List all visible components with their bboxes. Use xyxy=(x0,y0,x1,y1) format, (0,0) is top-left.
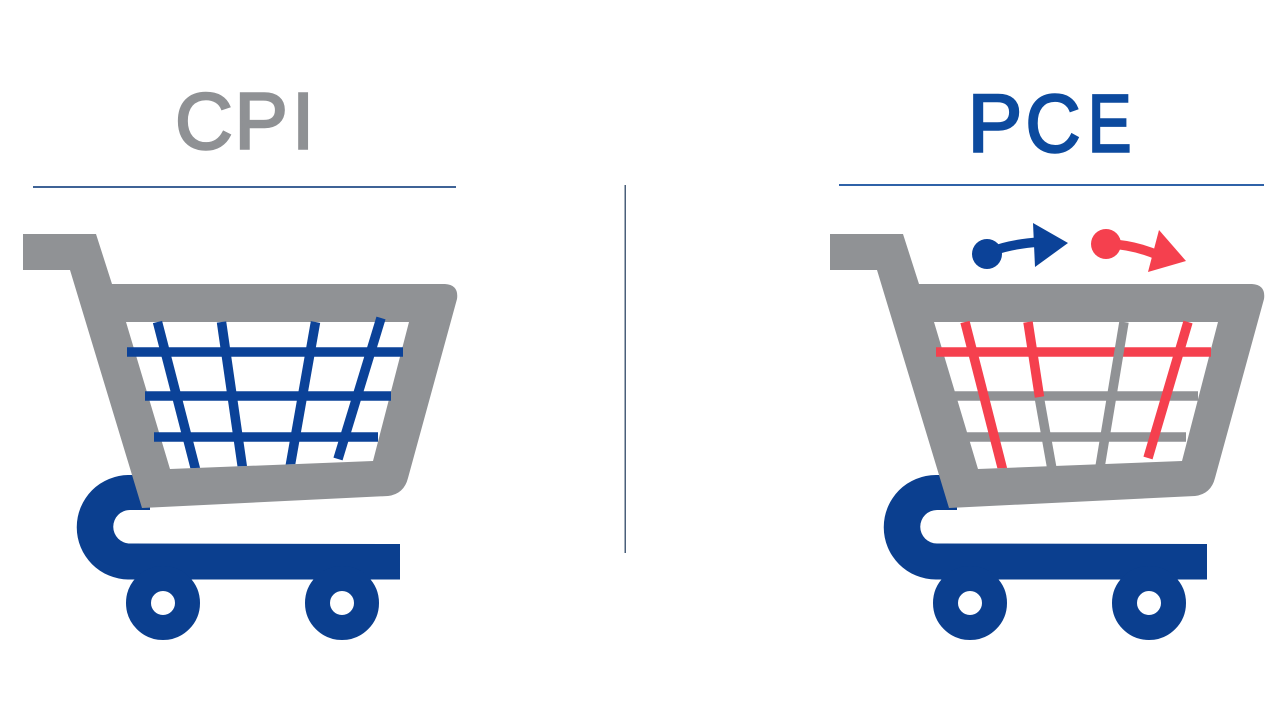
basket grid: grey horizontals xyxy=(952,396,1198,472)
basket grid: blue xyxy=(127,318,403,475)
heading: PCE xyxy=(968,77,1132,170)
cart: CPI xyxy=(23,234,457,628)
cart basket frame xyxy=(830,234,1264,508)
wheel right xyxy=(318,578,366,628)
wheel right xyxy=(1124,578,1174,628)
cart base and handle loop xyxy=(77,475,400,580)
infographic: CPI vs PCE shopping carts xyxy=(23,92,1264,640)
heading: PCE: E xyxy=(1088,78,1132,169)
icon: red substitution arrow xyxy=(1091,229,1186,272)
heading: CPI: CPI xyxy=(175,76,314,166)
cart basket frame xyxy=(23,234,457,508)
wheel left xyxy=(138,578,188,628)
basket grid: grey upright xyxy=(1100,322,1124,467)
centre divider xyxy=(624,185,626,553)
heading: PCE: C xyxy=(1025,77,1081,169)
cart base and handle loop xyxy=(884,475,1207,580)
basket grid: red xyxy=(936,322,1211,475)
rule under PCE xyxy=(839,184,1264,186)
heading: PCE: P xyxy=(968,78,1022,170)
wheel left xyxy=(946,578,994,628)
icon: blue substitution arrow xyxy=(972,223,1068,269)
cart: PCE xyxy=(830,223,1264,628)
rule under CPI xyxy=(33,186,456,188)
